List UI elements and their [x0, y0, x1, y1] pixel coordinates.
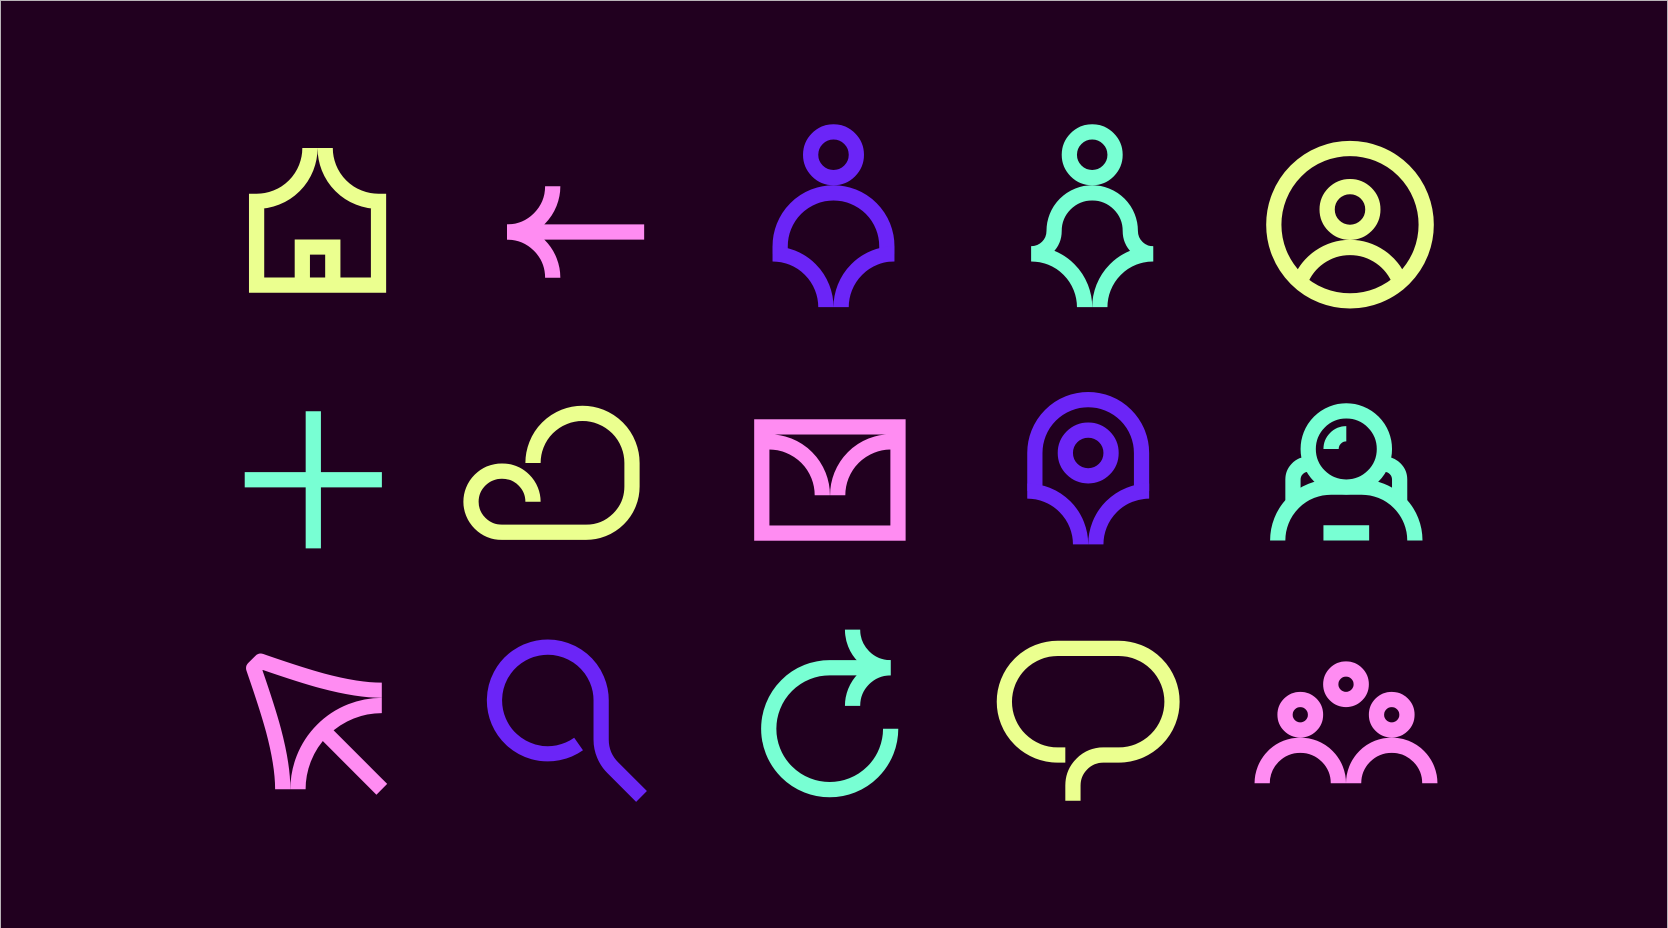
icon: refresh arrow	[769, 630, 891, 790]
icon: user in circle	[1274, 148, 1426, 301]
icon: chat bubble	[1004, 648, 1172, 801]
icon: cloud	[471, 413, 632, 532]
icon: search	[494, 647, 642, 796]
icon: plus	[245, 411, 382, 548]
icon: person purple	[773, 132, 894, 307]
icon: person teal	[1031, 132, 1153, 307]
icon: three people	[1262, 669, 1430, 783]
icon: location pin	[1027, 400, 1149, 544]
icon: arrow left	[507, 186, 644, 278]
icon: house	[257, 148, 379, 285]
icon: astronaut	[1278, 411, 1415, 540]
icon: cursor	[254, 661, 382, 789]
icon: mail	[762, 427, 898, 533]
